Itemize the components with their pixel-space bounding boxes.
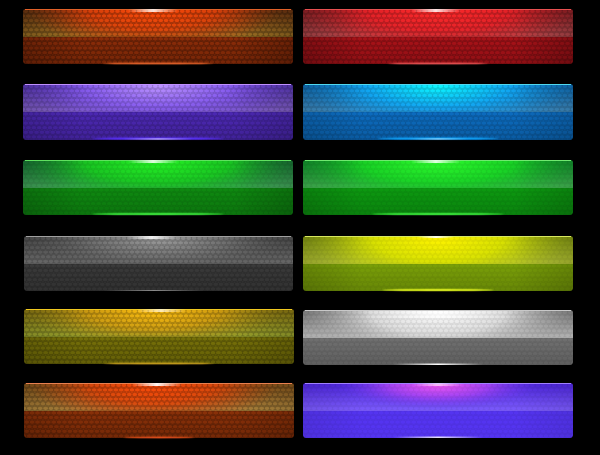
- button: dark grey: [24, 236, 293, 291]
- button: red-orange: [24, 383, 294, 438]
- button: bright green: [303, 160, 573, 215]
- button: silver: [303, 310, 573, 365]
- button: green: [23, 160, 293, 215]
- button: red: [303, 9, 573, 64]
- button: orange: [23, 9, 293, 64]
- button: lime: [303, 236, 573, 291]
- button: blue: [303, 84, 573, 140]
- button: gold: [24, 309, 294, 364]
- button: violet: [303, 383, 573, 438]
- button: purple: [23, 84, 293, 140]
